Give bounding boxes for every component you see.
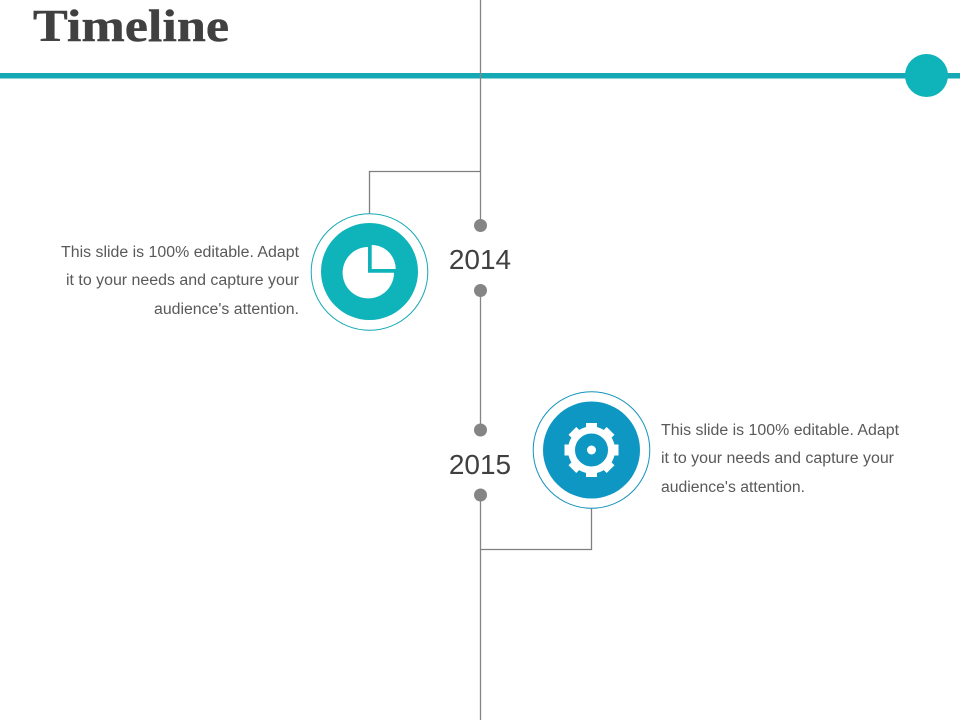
text block 2015: it to your needs and capture your [661,450,894,467]
year marker dots 2015 [474,424,487,502]
text block 2015 [661,422,900,496]
icon: gear [533,392,650,508]
year label 2015: 2015 [449,449,511,480]
text block 2014: it to your needs and capture your [66,272,299,289]
icon: pie chart [311,214,428,330]
entry: 2014 [61,172,511,330]
entry: 2015 [449,392,900,550]
text block 2014 [61,244,300,318]
year label 2014: 2014 [449,244,511,275]
text block 2015: audience's attention. [661,479,805,496]
connector 2015 [480,508,592,550]
text block 2014: audience's attention. [154,301,299,318]
title: Timeline [33,1,229,51]
year marker dots 2014 [474,219,487,297]
vertical timeline axis [480,0,482,720]
header rule with end circle [0,54,960,97]
text block 2014: This slide is 100% editable. Adapt [61,244,300,261]
connector 2014 [370,172,480,214]
text block 2015: This slide is 100% editable. Adapt [661,422,900,439]
